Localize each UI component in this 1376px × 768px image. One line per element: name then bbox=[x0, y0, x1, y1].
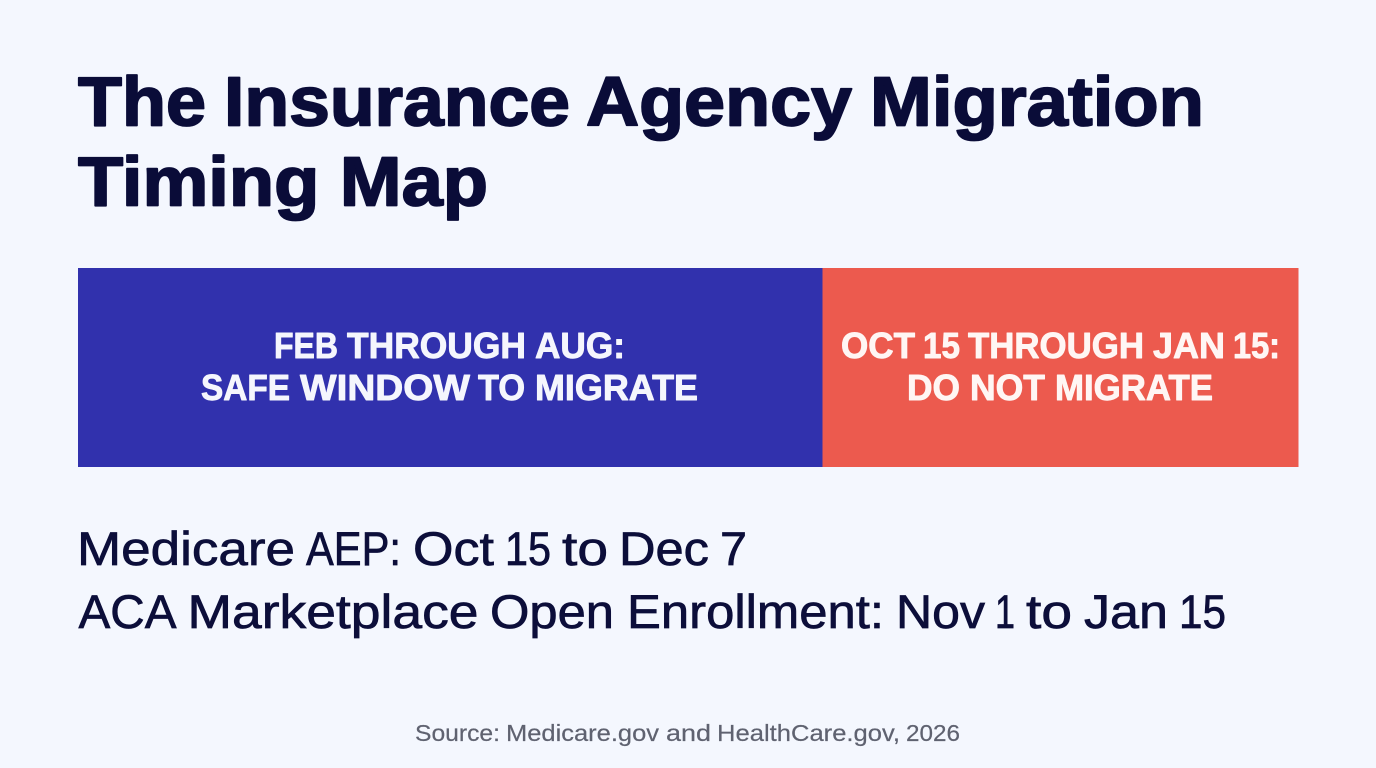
title: Timing Map bbox=[78, 142, 488, 220]
do not migrate label: THROUGH bbox=[968, 325, 1144, 366]
title: The bbox=[78, 62, 206, 140]
source note: 2026 bbox=[906, 720, 960, 746]
panel: do not migrate bbox=[822, 268, 1298, 467]
source note: HealthCare.gov, bbox=[717, 720, 900, 746]
enrollment dates text: AEP: bbox=[306, 522, 401, 575]
enrollment dates text: Marketplace bbox=[188, 585, 478, 638]
safe window label: THROUGH bbox=[347, 325, 526, 366]
title: Migration bbox=[870, 62, 1204, 140]
do not migrate label: DO bbox=[907, 367, 960, 408]
source note: and bbox=[666, 720, 711, 746]
enrollment dates text: Dec bbox=[619, 522, 709, 575]
enrollment dates text: 7 bbox=[720, 522, 747, 575]
enrollment dates text: Jan bbox=[1084, 585, 1168, 638]
safe window label: AUG: bbox=[535, 325, 625, 366]
enrollment dates text: 1 bbox=[995, 585, 1015, 638]
title bbox=[78, 62, 1204, 220]
source note: Medicare.gov bbox=[506, 720, 660, 746]
do not migrate label: MIGRATE bbox=[1055, 367, 1213, 408]
safe window label: SAFE bbox=[201, 367, 290, 408]
do not migrate label: OCT bbox=[841, 325, 915, 366]
enrollment dates text: 15 bbox=[1179, 585, 1226, 638]
safe window label: WINDOW bbox=[300, 367, 470, 408]
do not migrate label: NOT bbox=[970, 367, 1045, 408]
do not migrate label: 15: bbox=[1233, 325, 1280, 366]
enrollment dates text: Open bbox=[490, 585, 614, 638]
source note: Source: bbox=[415, 720, 500, 746]
do not migrate label: 15 bbox=[923, 325, 960, 366]
enrollment dates text: Oct bbox=[413, 522, 494, 575]
enrollment dates text: to bbox=[1026, 585, 1072, 638]
timeline bar bbox=[78, 268, 1298, 467]
safe window label bbox=[201, 325, 698, 408]
safe window label: TO bbox=[478, 367, 525, 408]
enrollment dates text: Medicare bbox=[77, 522, 295, 575]
title: Agency bbox=[586, 62, 852, 140]
enrollment dates text: Enrollment: bbox=[627, 585, 884, 638]
panel: safe window bbox=[78, 268, 822, 467]
title: Insurance bbox=[224, 62, 570, 140]
safe window label: MIGRATE bbox=[535, 367, 698, 408]
safe window label: FEB bbox=[274, 325, 338, 366]
enrollment dates text: ACA bbox=[78, 585, 177, 638]
enrollment dates text: Nov bbox=[896, 585, 986, 638]
enrollment dates text bbox=[77, 522, 1226, 638]
enrollment dates text: to bbox=[562, 522, 608, 575]
source note bbox=[415, 720, 960, 746]
do not migrate label: JAN bbox=[1153, 325, 1225, 366]
enrollment dates text: 15 bbox=[505, 522, 551, 575]
do not migrate label bbox=[841, 325, 1280, 408]
